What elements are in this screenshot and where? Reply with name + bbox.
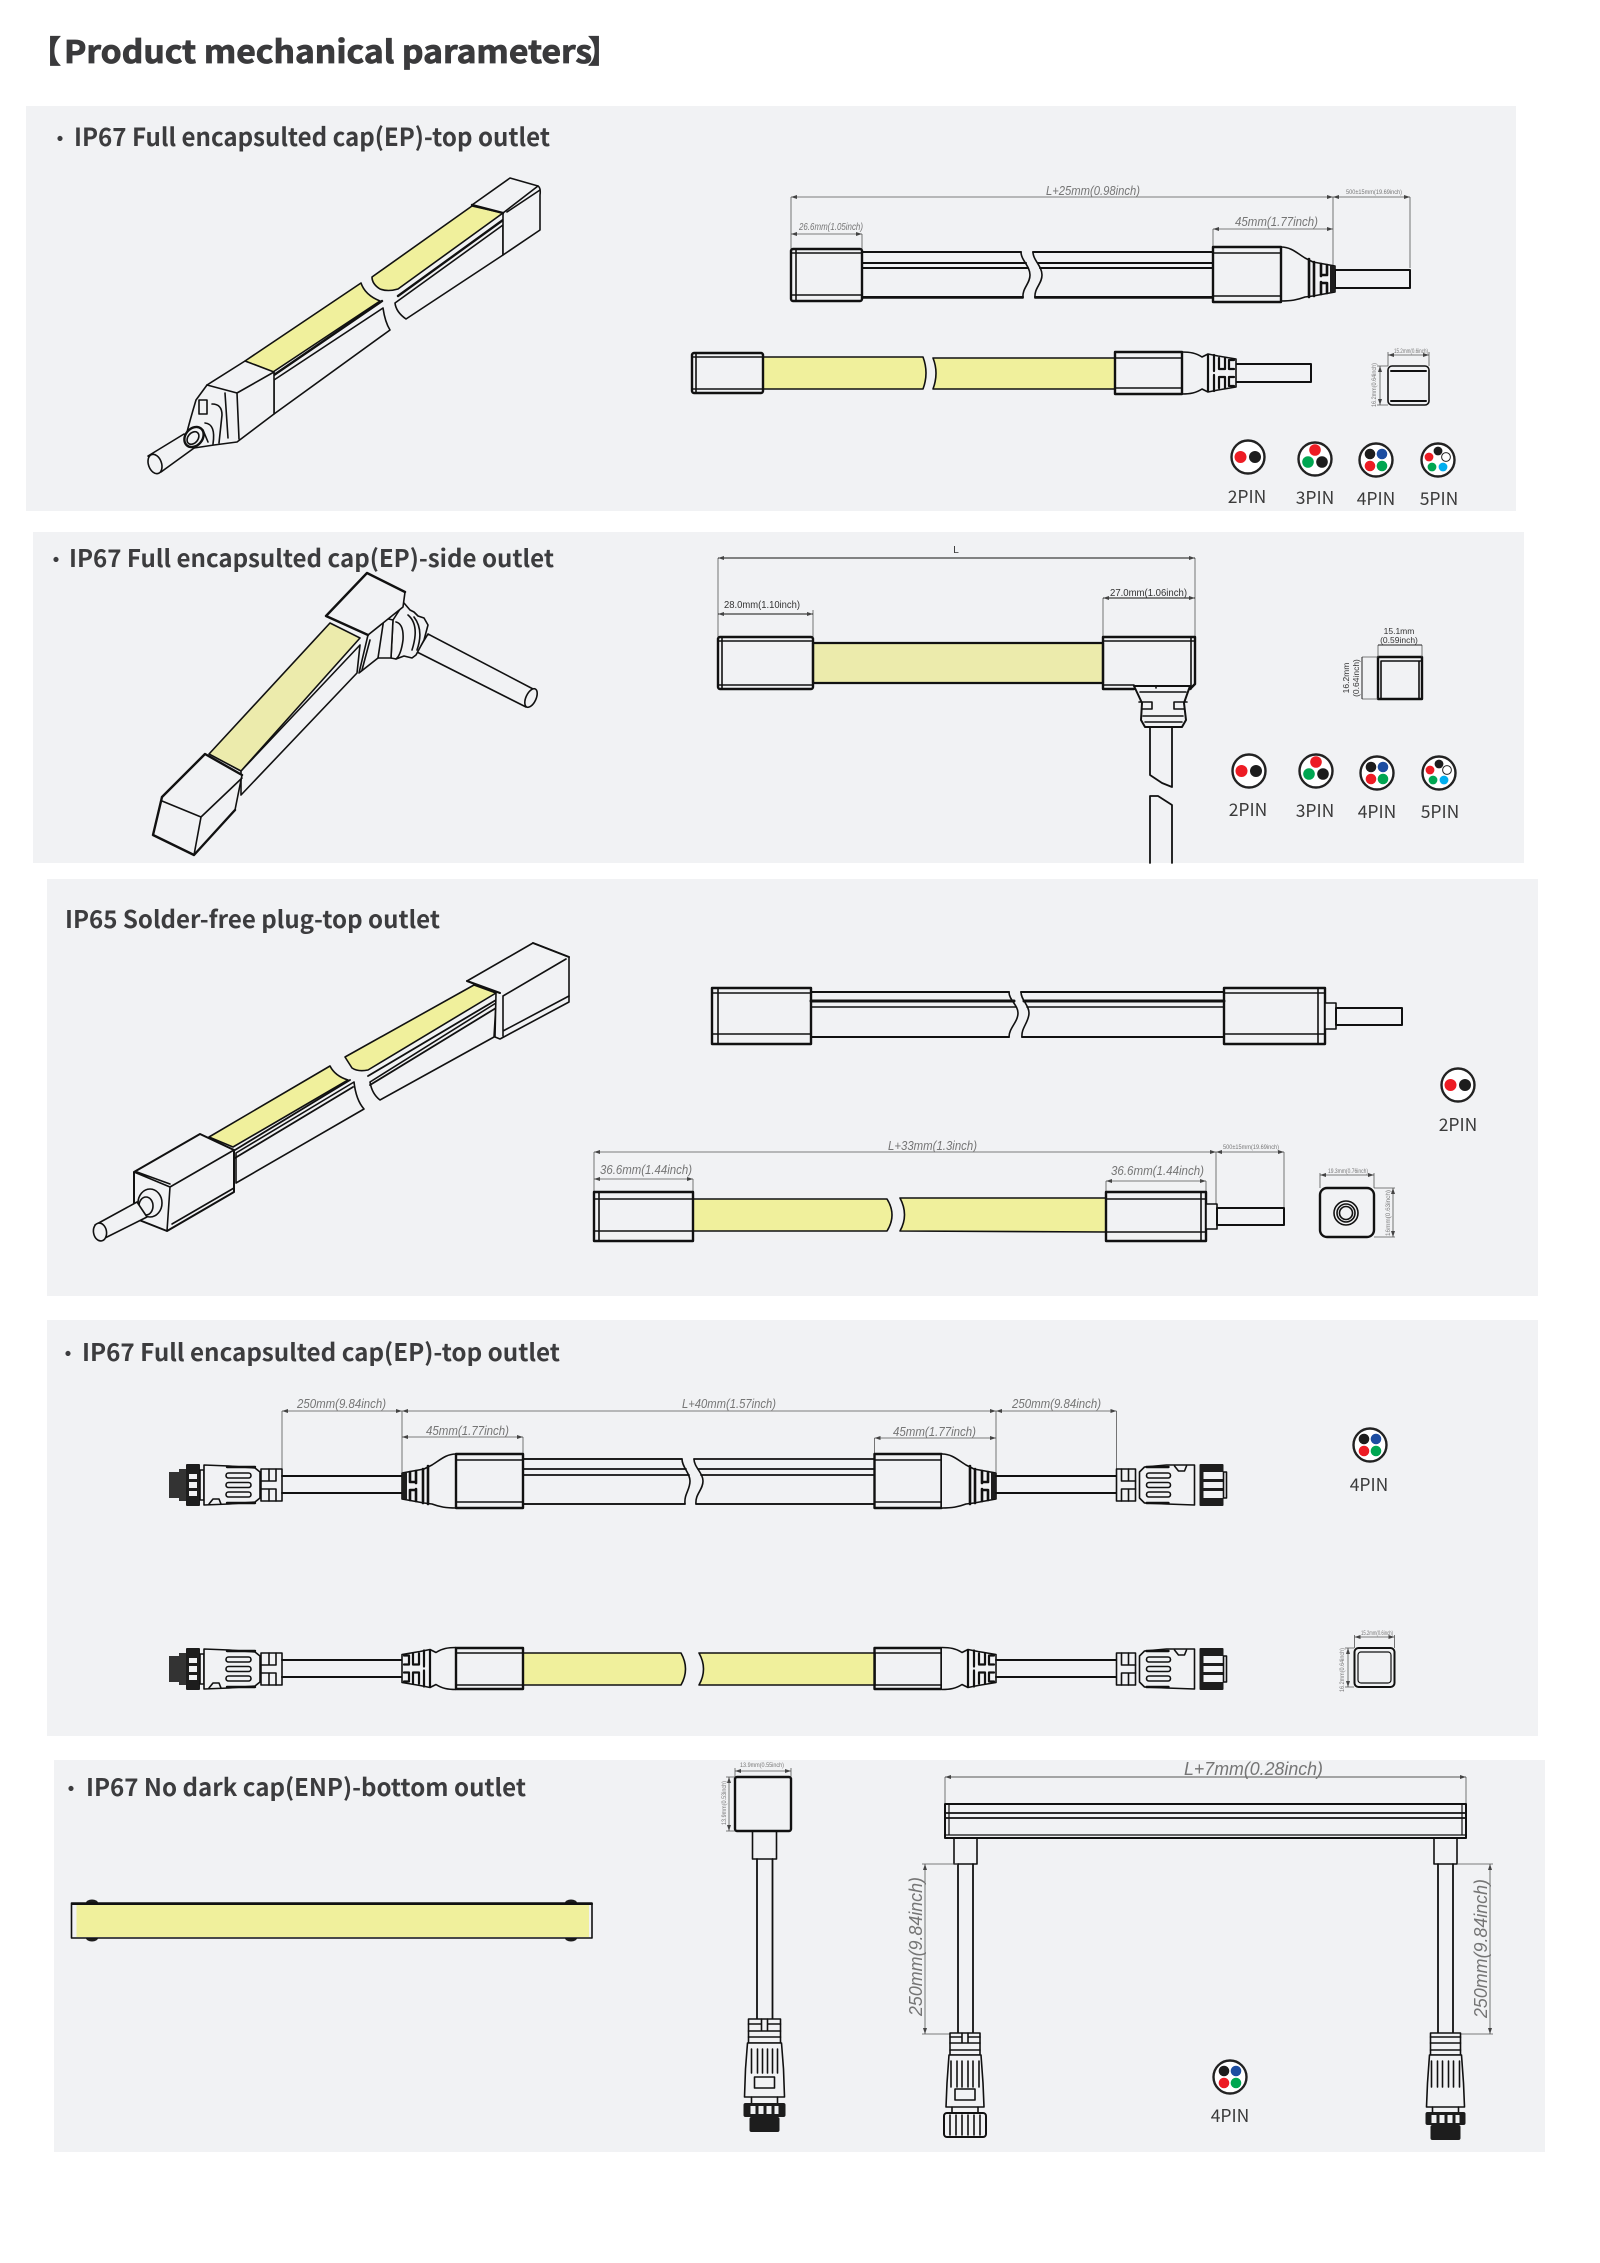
- pin: 2PIN: [1228, 440, 1266, 509]
- side view: plug: [712, 988, 1402, 1044]
- strain relief: right: [942, 1454, 996, 1508]
- pin: 4PIN: 4PIN: [1357, 486, 1395, 511]
- front view with dimensions: plug: 36.6mm(1.44inch): [600, 1163, 692, 1177]
- strain relief: right: [942, 1648, 996, 1690]
- pin: 4PIN: 4PIN: [1211, 2103, 1249, 2128]
- side view: bottom outlet with dimensions: L+7mm(0.28inch): [1184, 1759, 1323, 1779]
- pin: 5PIN: 5PIN: [1421, 799, 1459, 824]
- end view: bottom outlet: 13.9mm(0.53inch): [721, 1781, 728, 1825]
- pin: 3PIN: 3PIN: [1296, 485, 1334, 510]
- heading: panel 5: IP67 No dark cap(ENP)-bottom outlet: [86, 1768, 526, 1803]
- dimension: overall length: 45mm(1.77inch): [1235, 214, 1318, 229]
- heading: panel 1: IP67 Full encapsulted cap(EP)-top outlet: [74, 118, 550, 154]
- heading: panel 3: IP65 Solder-free plug-top outlet: [65, 900, 440, 935]
- side view with dimensions: [791, 184, 1410, 302]
- heading: panel 4: IP67 Full encapsulted cap(EP)-top outlet: [82, 1333, 560, 1368]
- front view: both-end leads: [169, 1648, 1226, 1690]
- heading: panel 2: ·: [46, 544, 66, 573]
- pin: 2PIN: 2PIN: [1229, 797, 1267, 822]
- side outlet elevation: [718, 637, 1195, 863]
- dimensions: panel 4: L+40mm(1.57inch): [682, 1397, 776, 1411]
- end view with dimensions: plug: 16mm(0.63inch): [1385, 1190, 1392, 1236]
- top view: yellow strip: [72, 1900, 592, 1942]
- pin: 3PIN: [1296, 442, 1334, 510]
- side view: both-end leads: [169, 1454, 1226, 1508]
- cross-section with dimensions: [1371, 348, 1429, 407]
- cross-section: panel 4: 16.2mm(0.64inch): [1339, 1648, 1346, 1692]
- connector: right plug: [1116, 1464, 1226, 1506]
- pin: 2PIN: [1229, 754, 1267, 822]
- dimensions: side outlet: 27.0mm(1.06inch): [1110, 588, 1187, 599]
- dimension: overall length: [791, 184, 1410, 268]
- pin: 4PIN: [1357, 444, 1395, 511]
- pin: 5PIN: 5PIN: [1420, 486, 1458, 511]
- heading: panel 5: ·: [61, 1773, 81, 1802]
- pin: 4PIN: 4PIN: [1350, 1472, 1388, 1497]
- title: 【: [30, 27, 61, 72]
- panel: IP65 solder-free plug: [47, 879, 1538, 1296]
- connector: left lead: [944, 2033, 986, 2137]
- cross-section with dimensions: 15.2mm(0.6inch): [1394, 348, 1428, 355]
- pin: 5PIN: [1421, 756, 1459, 824]
- pin: 2PIN: 2PIN: [1439, 1112, 1477, 1137]
- connector: right lead: [1426, 2033, 1466, 2140]
- front view with dimensions: plug: [594, 1139, 1284, 1241]
- dimensions: panel 4: 45mm(1.77inch): [893, 1425, 976, 1439]
- dimensions: side outlet: [718, 545, 1195, 637]
- dimensions: panel 4: 250mm(9.84inch): [296, 1397, 386, 1411]
- pin: 3PIN: 3PIN: [1296, 798, 1334, 823]
- isometric side outlet drawing: [153, 573, 540, 855]
- panel: IP67 EP top outlet, both ends: [47, 1320, 1538, 1736]
- side view: bottom outlet with dimensions: 250mm(9.84inch): [906, 1877, 926, 2017]
- connector: right plug: [1116, 1648, 1226, 1690]
- dimensions: panel 4: 45mm(1.77inch): [426, 1424, 509, 1438]
- strain relief: left: [402, 1648, 456, 1690]
- end view with dimensions: plug: [1320, 1168, 1395, 1237]
- panel: IP67 EP top outlet: [26, 106, 1516, 511]
- end view: bottom outlet: 13.9mm(0.55inch): [740, 1762, 784, 1769]
- pin: 2PIN: 2PIN: [1228, 484, 1266, 509]
- strain relief: left: [402, 1454, 456, 1508]
- front view with yellow strip: [692, 352, 1311, 394]
- end view: bottom outlet: [721, 1762, 791, 2132]
- front view with dimensions: plug: 500±15mm(19.69inch): [1223, 1144, 1279, 1151]
- isometric plug drawing: [92, 943, 569, 1242]
- pin: 4PIN: [1350, 1428, 1388, 1497]
- cross-section: side outlet: 15.1mm: [1384, 626, 1414, 636]
- panel: IP67 ENP bottom outlet: [54, 1759, 1545, 2152]
- end view with dimensions: plug: 19.3mm(0.76inch): [1328, 1168, 1368, 1175]
- dimensions: panel 4: 250mm(9.84inch): [1011, 1397, 1101, 1411]
- heading: panel 2: IP67 Full encapsulted cap(EP)-side outlet: [69, 539, 554, 574]
- dimension: overall length: 26.6mm(1.05inch): [798, 221, 863, 233]
- cross-section: side outlet: (0.59inch): [1380, 635, 1418, 645]
- cross-section: side outlet: (0.64inch): [1351, 659, 1361, 697]
- side view: bottom outlet with dimensions: 250mm(9.84inch): [1471, 1879, 1491, 2019]
- dimensions: panel 4: [282, 1397, 1116, 1472]
- heading: panel 4: ·: [58, 1338, 78, 1367]
- pin: 4PIN: [1358, 756, 1396, 824]
- heading: panel 1: ·: [50, 123, 70, 152]
- front view with dimensions: plug: 36.6mm(1.44inch): [1111, 1164, 1204, 1178]
- pin: 4PIN: [1211, 2060, 1249, 2128]
- pin: 4PIN: 4PIN: [1358, 799, 1396, 824]
- dimension: overall length: 500±15mm(19.69inch): [1346, 189, 1402, 196]
- pin: 2PIN: [1439, 1068, 1477, 1137]
- pin: 3PIN: [1296, 754, 1334, 823]
- isometric strip drawing: [145, 178, 540, 476]
- panel: IP67 EP side outlet: [33, 532, 1524, 863]
- connector: left plug: [169, 1648, 282, 1690]
- cross-section: panel 4: 15.2mm(0.6inch): [1361, 1630, 1393, 1637]
- title: Product mechanical parameters: [64, 27, 592, 72]
- pin: 5PIN: [1420, 444, 1458, 511]
- cross-section: side outlet: 16.2mm: [1341, 663, 1351, 693]
- cross-section: panel 4: [1339, 1630, 1394, 1692]
- cross-section with dimensions: 16.2mm(0.64inch): [1371, 363, 1378, 407]
- title: 】: [588, 27, 619, 72]
- dimension: overall length: L+25mm(0.98inch): [1046, 184, 1140, 198]
- connector: left plug: [169, 1464, 282, 1506]
- dimensions: side outlet: L: [953, 545, 959, 556]
- cross-section: side outlet: [1341, 626, 1422, 699]
- dimensions: side outlet: 28.0mm(1.10inch): [724, 600, 800, 611]
- connector: vertical: [744, 2019, 786, 2132]
- front view with dimensions: plug: L+33mm(1.3inch): [888, 1139, 977, 1153]
- side view: bottom outlet with dimensions: [906, 1759, 1493, 2140]
